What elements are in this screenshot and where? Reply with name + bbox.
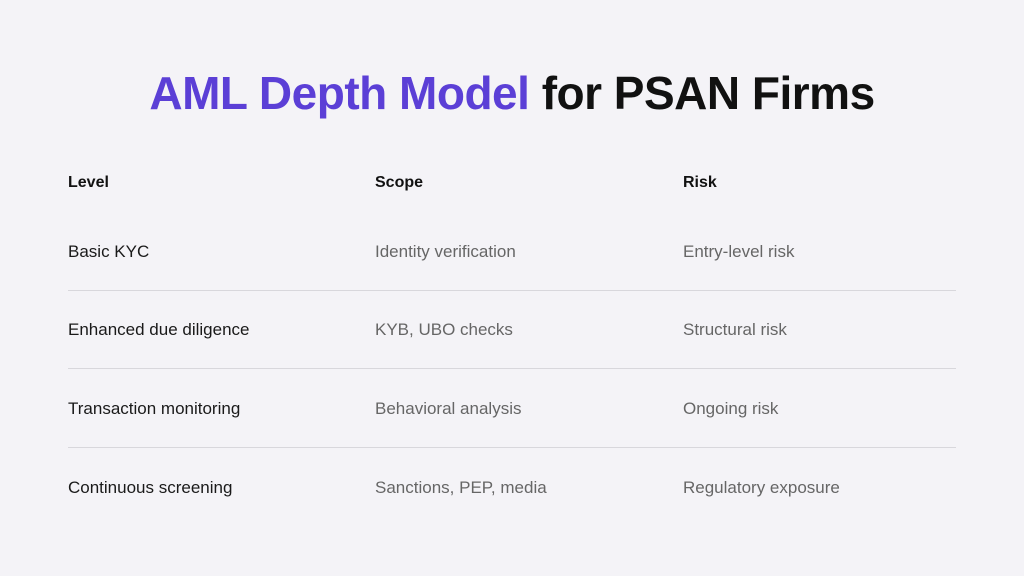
header: scope: Scope: [375, 174, 423, 191]
row 4: [68, 478, 840, 497]
row 3: Behavioral analysis: [375, 399, 521, 418]
header: risk: Risk: [683, 174, 717, 191]
row 4: Sanctions, PEP, media: [375, 478, 547, 497]
row 3: Ongoing risk: [683, 399, 778, 418]
row 4: Regulatory exposure: [683, 478, 840, 497]
title: AML Depth Model for PSAN Firms: [149, 67, 875, 119]
row 2: [68, 320, 787, 339]
row 1: Basic KYC: [68, 242, 149, 261]
row 1: Entry-level risk: [683, 242, 794, 261]
row 4: Continuous screening: [68, 478, 232, 497]
row 3: [68, 399, 778, 418]
row 1: Identity verification: [375, 242, 516, 261]
row 1: [68, 242, 794, 261]
row 3: Transaction monitoring: [68, 399, 240, 418]
row 2: KYB, UBO checks: [375, 320, 513, 339]
header: level: Level: [68, 174, 109, 191]
row 2: Enhanced due diligence: [68, 320, 249, 339]
row 2: Structural risk: [683, 320, 787, 339]
